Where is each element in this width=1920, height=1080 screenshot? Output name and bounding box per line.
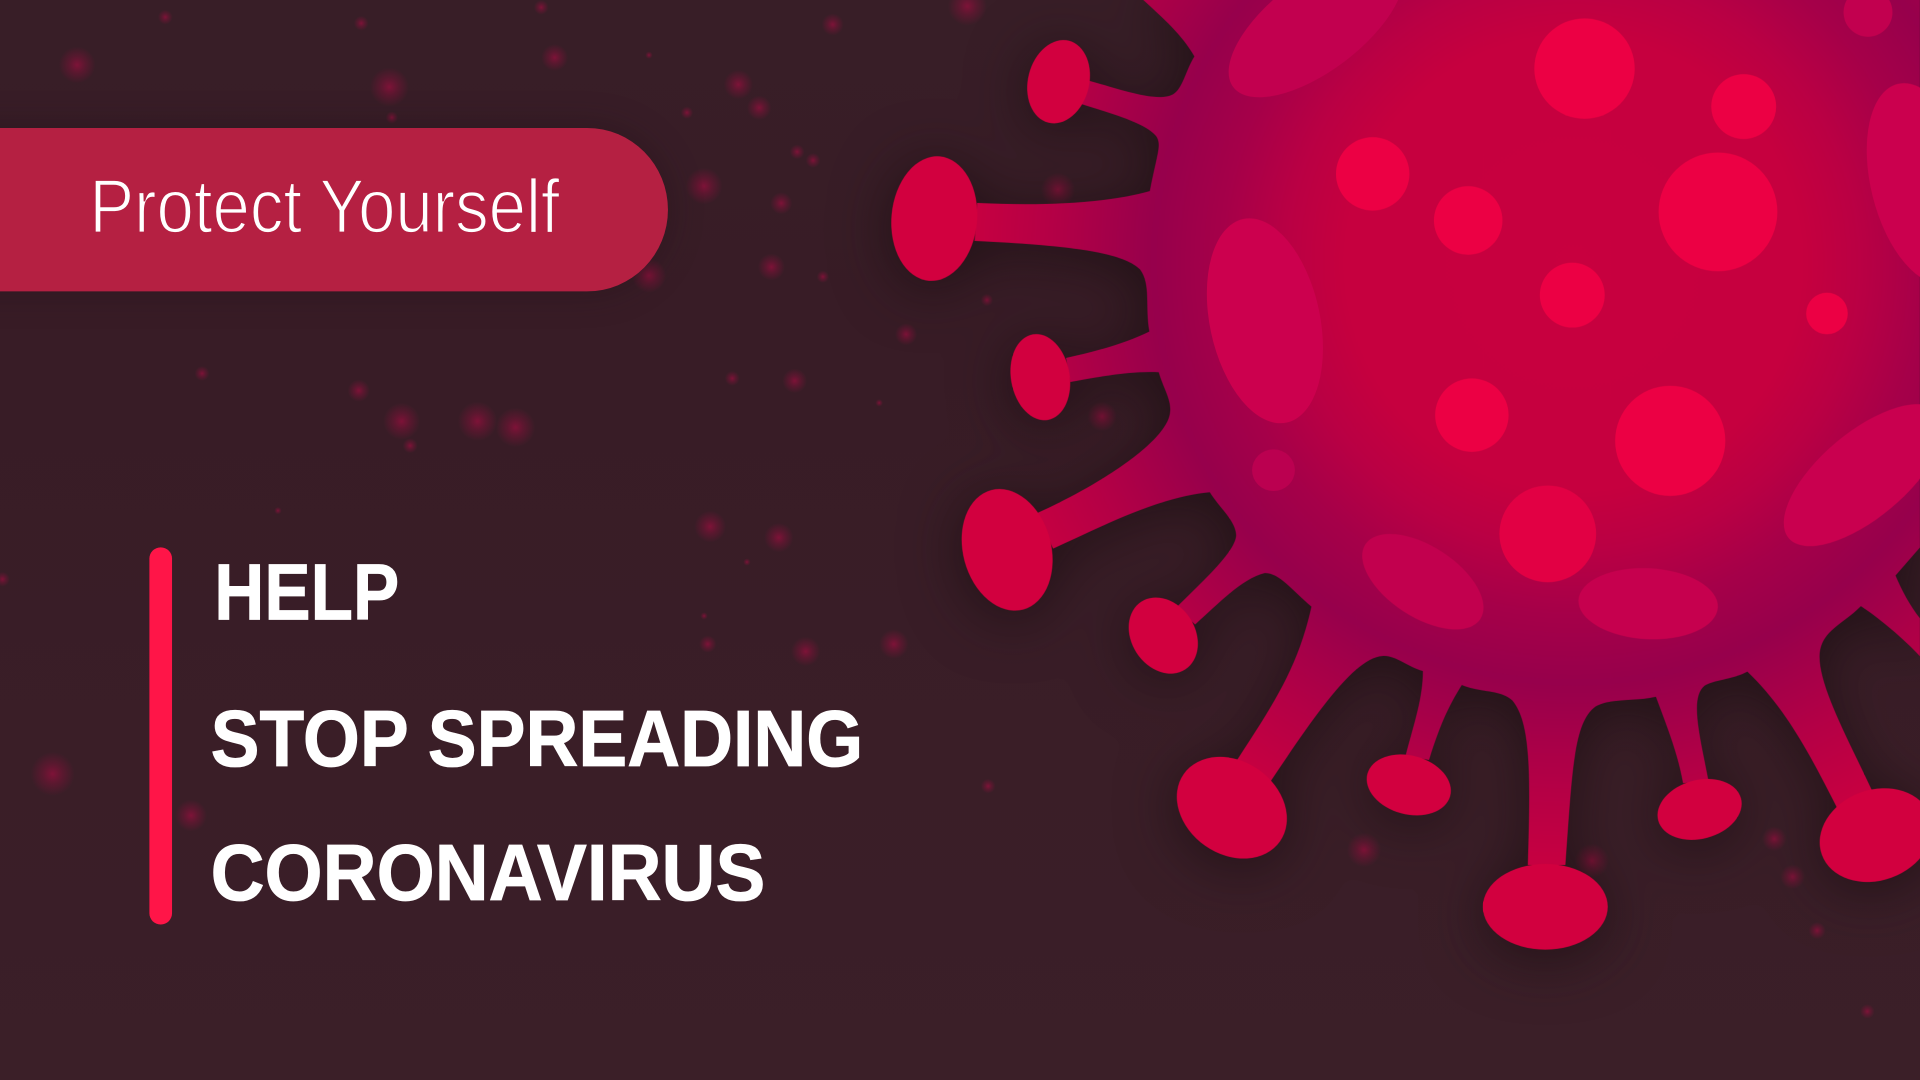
headline line: STOP SPREADING: STOP SPREADING xyxy=(211,694,863,783)
headline text xyxy=(211,548,863,917)
coronavirus illustration xyxy=(886,0,1920,950)
headline line: CORONAVIRUS: CORONAVIRUS xyxy=(211,828,765,917)
banner: Protect Yourself xyxy=(0,128,668,291)
accent bar xyxy=(149,547,172,924)
spike heads xyxy=(886,33,1920,950)
virus silhouette with spike heads xyxy=(886,0,1920,950)
bright red dots on virus xyxy=(1336,18,1848,582)
virus body and stalks xyxy=(975,0,1920,865)
banner title: Protect Yourself xyxy=(89,165,560,250)
banner pill xyxy=(0,128,668,291)
headline line: HELP: HELP xyxy=(214,548,399,637)
large pale patches on virus xyxy=(1189,0,1920,649)
